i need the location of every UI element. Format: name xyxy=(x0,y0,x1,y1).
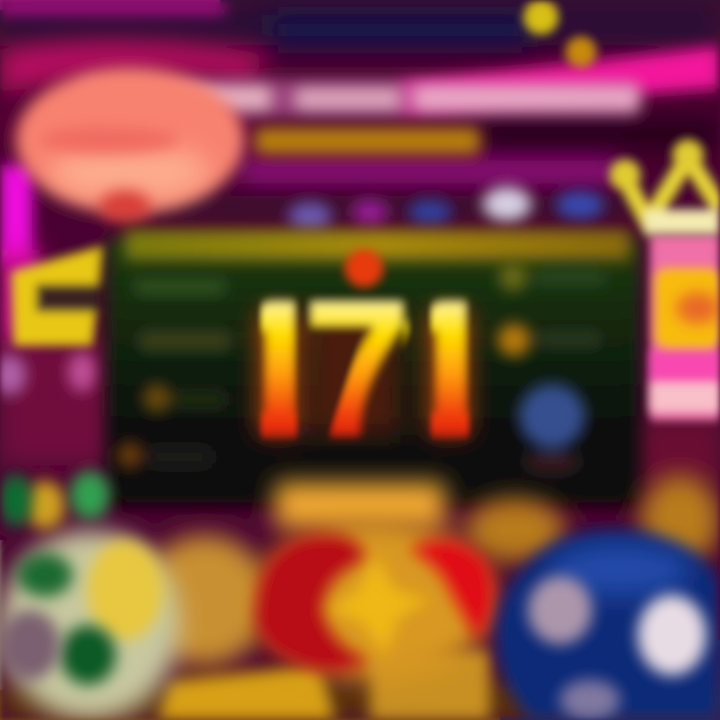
heading text line xyxy=(80,80,640,116)
big number 171: 1 xyxy=(223,263,329,475)
right pink column with crown xyxy=(610,140,720,420)
background lights row xyxy=(288,187,604,230)
red poker chip xyxy=(255,520,495,680)
big number 171: 7 xyxy=(304,263,410,475)
blue poker chip xyxy=(496,530,720,720)
icon: gold coins top xyxy=(524,0,596,67)
panel top bar xyxy=(125,230,630,260)
heading banner xyxy=(80,80,640,154)
left yellow logo sign xyxy=(12,246,104,345)
slot machine screen panel xyxy=(106,230,640,506)
left side text rows xyxy=(117,280,230,468)
speech bubble xyxy=(16,68,244,222)
icon: red gem xyxy=(345,249,383,287)
glow behind number xyxy=(258,310,470,435)
gold pile xyxy=(0,475,720,720)
icon: crown xyxy=(610,140,720,234)
sub heading text xyxy=(255,128,480,154)
right side text rows xyxy=(498,263,605,356)
yellow badge xyxy=(655,268,720,348)
panel body xyxy=(106,238,640,506)
green poker chip xyxy=(0,471,180,720)
big number 171: 1 xyxy=(394,263,500,475)
gold bars bottom xyxy=(158,665,335,720)
icon: blue globe xyxy=(519,384,585,472)
bottom treasure pile xyxy=(0,471,720,720)
column xyxy=(650,235,720,420)
